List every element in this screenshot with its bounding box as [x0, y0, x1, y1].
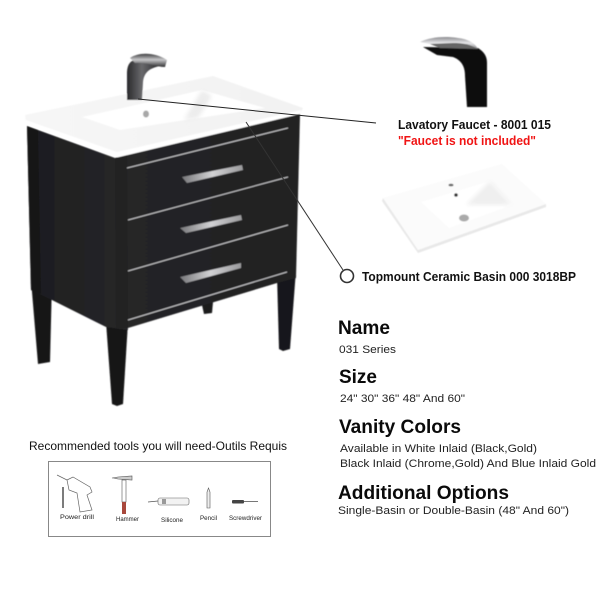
size value: 24" 30" 36" 48" And 60" [340, 393, 465, 405]
callout circle [340, 270, 354, 282]
basin label: Topmount Ceramic Basin 000 3018BP [362, 270, 576, 284]
right leg [277, 270, 296, 351]
tool labels: Silicone [161, 517, 183, 524]
heading: vanity colors: Vanity Colors [339, 417, 461, 438]
leader line to basin [246, 122, 343, 270]
colors line 2: Black Inlaid (Chrome,Gold) And Blue Inlaid Gold [340, 458, 596, 470]
front leg [106, 322, 128, 406]
icon: screwdriver [232, 500, 258, 504]
heading: size: Size [339, 367, 377, 388]
back leg [202, 302, 213, 314]
tool labels [60, 514, 263, 524]
drain [143, 110, 149, 118]
icon: power drill [57, 475, 92, 512]
vanity cabinet with basin and faucet [25, 54, 303, 406]
tool labels: Power drill [60, 514, 95, 521]
icon: faucet detail [420, 37, 487, 107]
tool labels: Hammer [116, 516, 140, 523]
panel: tools [48, 462, 270, 536]
cabinet side panel [27, 126, 128, 330]
drawer handles [180, 165, 243, 283]
drawer lines [127, 128, 288, 320]
leader line to faucet [138, 99, 376, 123]
basin bowl [82, 90, 265, 130]
basin detail image [382, 164, 546, 253]
ceramic basin top [25, 76, 303, 157]
colors line 1: Available in White Inlaid (Black,Gold) [340, 443, 537, 455]
heading: additional options: Additional Options [338, 483, 509, 504]
options value: Single-Basin or Double-Basin (48" And 60") [338, 505, 569, 517]
icon: silicone tube [148, 498, 189, 505]
tool labels: Screwdriver [229, 515, 263, 522]
tools heading: Recommended tools you will need-Outils Requis [29, 439, 287, 453]
cabinet front [107, 114, 300, 328]
icon: hammer [112, 476, 132, 514]
small faucet [127, 54, 167, 100]
heading: name: Name [338, 318, 390, 339]
name value: 031 Series [339, 344, 397, 356]
left rear leg [31, 280, 52, 364]
faucet warning: "Faucet is not included" [398, 134, 536, 148]
tool labels: Pencil [200, 515, 218, 522]
icon: pencil [207, 488, 210, 508]
faucet label: Lavatory Faucet - 8001 015 [398, 118, 551, 132]
